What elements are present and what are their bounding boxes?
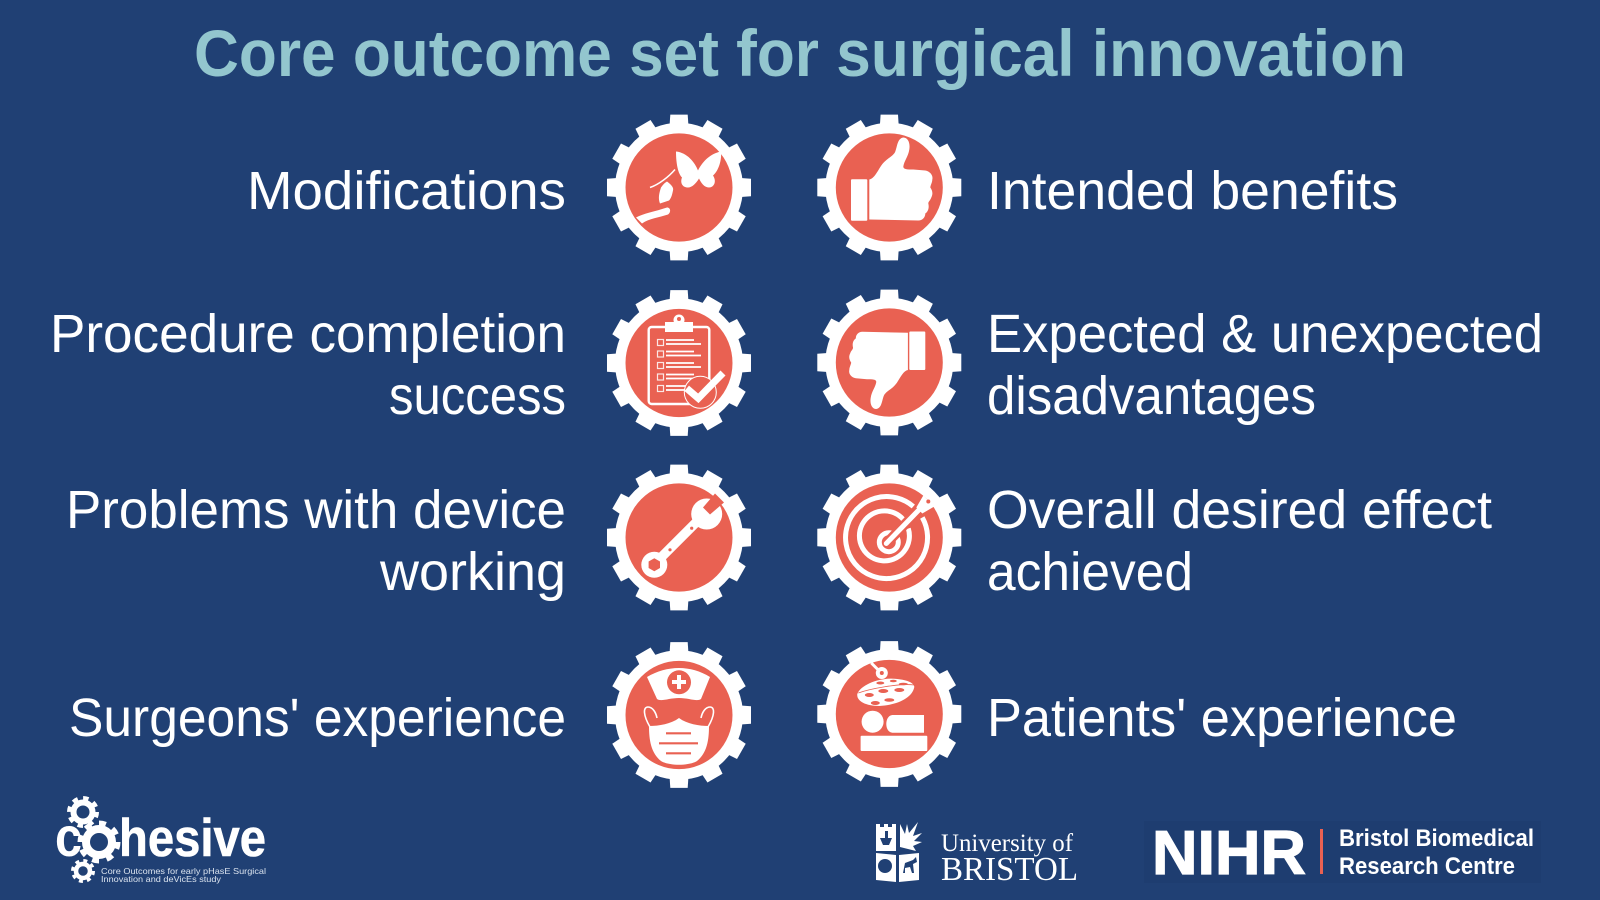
- icon: clipboard checklist gear: [607, 290, 751, 436]
- logo: University of Bristol: University of: [941, 830, 1074, 857]
- icon: target and arrow gear: [817, 465, 961, 610]
- logo: NIHR Bristol Biomedical Research Centre: [1144, 819, 1541, 888]
- icon: wrench gear: [607, 465, 751, 610]
- icon: surgical lamp and patient gear: [817, 641, 961, 787]
- label: Surgeons' experience: Surgeons' experience: [69, 688, 566, 748]
- label: Problems with device working: working: [379, 542, 566, 602]
- logo: NIHR Bristol Biomedical Research Centre: Bristol Biomedical: [1339, 825, 1534, 852]
- label: Overall desired effect achieved: achieved: [987, 542, 1193, 602]
- logo: cohesive: c: [55, 805, 82, 868]
- logo: University of Bristol: BRISTOL: [941, 851, 1078, 888]
- label: Overall desired effect achieved: [987, 480, 1492, 602]
- label: Procedure completion success: Procedure completion: [50, 304, 566, 364]
- logo: cohesive: [55, 798, 266, 884]
- icon: butterfly life cycle gear: [607, 115, 751, 260]
- label: Overall desired effect achieved: Overall desired effect: [987, 480, 1492, 540]
- label: Procedure completion success: success: [389, 366, 566, 426]
- label: Problems with device working: Problems with device: [66, 480, 566, 540]
- label: Procedure completion success: [50, 304, 566, 426]
- icon: thumbs down gear: [817, 290, 961, 435]
- icon: middle cog: [80, 823, 118, 861]
- icon: masked nurse gear: [607, 642, 751, 788]
- icon: top cog: [69, 798, 97, 826]
- label: Expected and unexpected disadvantages: disadvantages: [987, 366, 1316, 426]
- title: Core outcome set for surgical innovation: [194, 16, 1406, 90]
- label: Expected and unexpected disadvantages: Expected & unexpected: [987, 304, 1543, 364]
- logo: cohesive: Core Outcomes for early pHasE Surgical: [101, 866, 266, 876]
- logo: NIHR Bristol Biomedical Research Centre: Research Centre: [1339, 853, 1515, 880]
- icon: Bristol crest: [876, 822, 922, 882]
- logo: University of Bristol: [876, 822, 1078, 888]
- icon: thumbs up gear: [817, 115, 961, 260]
- label: Modifications: Modifications: [247, 161, 566, 221]
- icon: bottom cog: [72, 860, 94, 882]
- logo: cohesive: hesive: [119, 809, 266, 868]
- label: Intended benefits: Intended benefits: [987, 161, 1398, 221]
- logo: NIHR Bristol Biomedical Research Centre: NIHR: [1152, 819, 1306, 888]
- label: Problems with device working: [66, 480, 566, 602]
- logo: cohesive: Innovation and deVicEs study: [101, 874, 222, 884]
- label: Expected and unexpected disadvantages: [987, 304, 1543, 426]
- label: Patients' experience: Patients' experience: [987, 688, 1457, 748]
